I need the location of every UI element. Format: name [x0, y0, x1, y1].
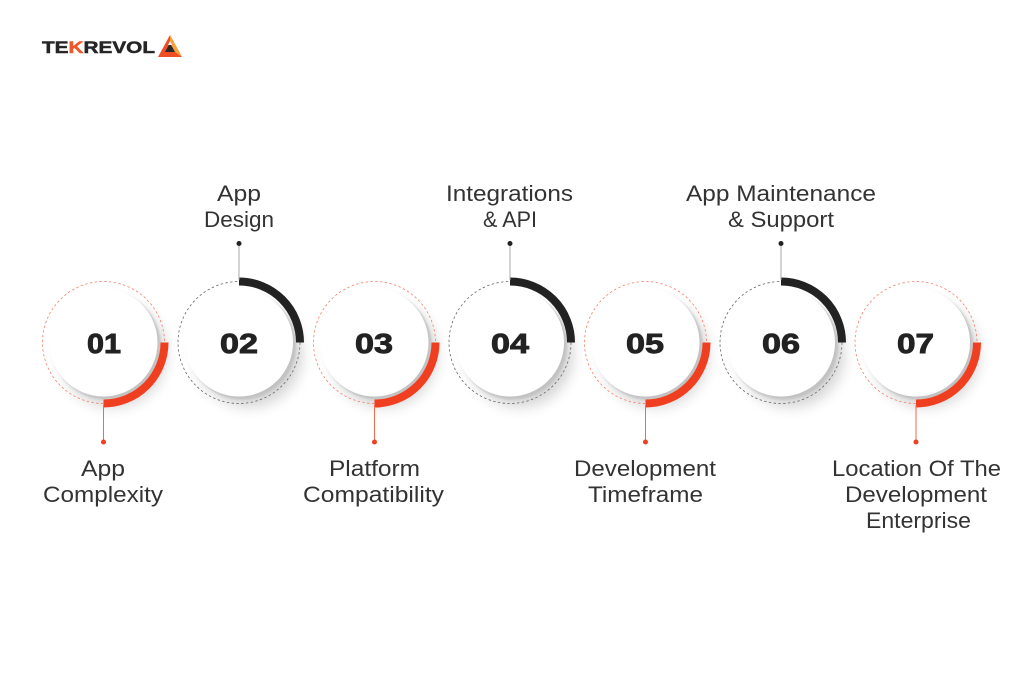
step 02: App Design [178, 181, 302, 407]
logo: TekRevol: TE KREVOL [42, 38, 155, 57]
step 01: App Complexity [42, 282, 166, 507]
step 05: Development Timeframe: 05 [626, 328, 664, 359]
step 03: Platform Compatibility [303, 282, 444, 507]
step 03: Platform Compatibility: Compatibility [303, 482, 444, 507]
step 03: Platform Compatibility: 03 [355, 328, 393, 359]
step 01: App Complexity: App [81, 456, 125, 481]
step 04: Integrations & API [446, 181, 573, 407]
step 06: App Maintenance & Support [686, 181, 876, 407]
step 07: Location Of The Development Enterprise [832, 282, 1001, 533]
step 02: App Design: Design [204, 207, 274, 232]
step 02: App Design: 02 [220, 328, 258, 359]
step 07: Location Of The Development Enterprise: Location Of The [832, 456, 1001, 481]
step 06: App Maintenance & Support: & Support [728, 207, 834, 232]
step 04: Integrations & API: Integrations [446, 181, 573, 206]
step 07: Location Of The Development Enterprise: Development [845, 482, 987, 507]
step 01: App Complexity: 01 [87, 328, 121, 359]
step 02: App Design: App [217, 181, 261, 206]
step 07: Location Of The Development Enterprise: Enterprise [866, 508, 971, 533]
step 03: Platform Compatibility: Platform [329, 456, 420, 481]
step 07: Location Of The Development Enterprise: 07 [897, 328, 934, 359]
step 06: App Maintenance & Support: 06 [762, 328, 800, 359]
step 04: Integrations & API: & API [483, 207, 537, 232]
step 05: Development Timeframe [574, 282, 716, 507]
step 05: Development Timeframe: Development [574, 456, 716, 481]
step 05: Development Timeframe: Timeframe [588, 482, 703, 507]
step 04: Integrations & API: 04 [491, 328, 530, 359]
step 01: App Complexity: Complexity [43, 482, 163, 507]
step 06: App Maintenance & Support: App Maintenance [686, 181, 876, 206]
logo: TekRevol [42, 35, 182, 57]
